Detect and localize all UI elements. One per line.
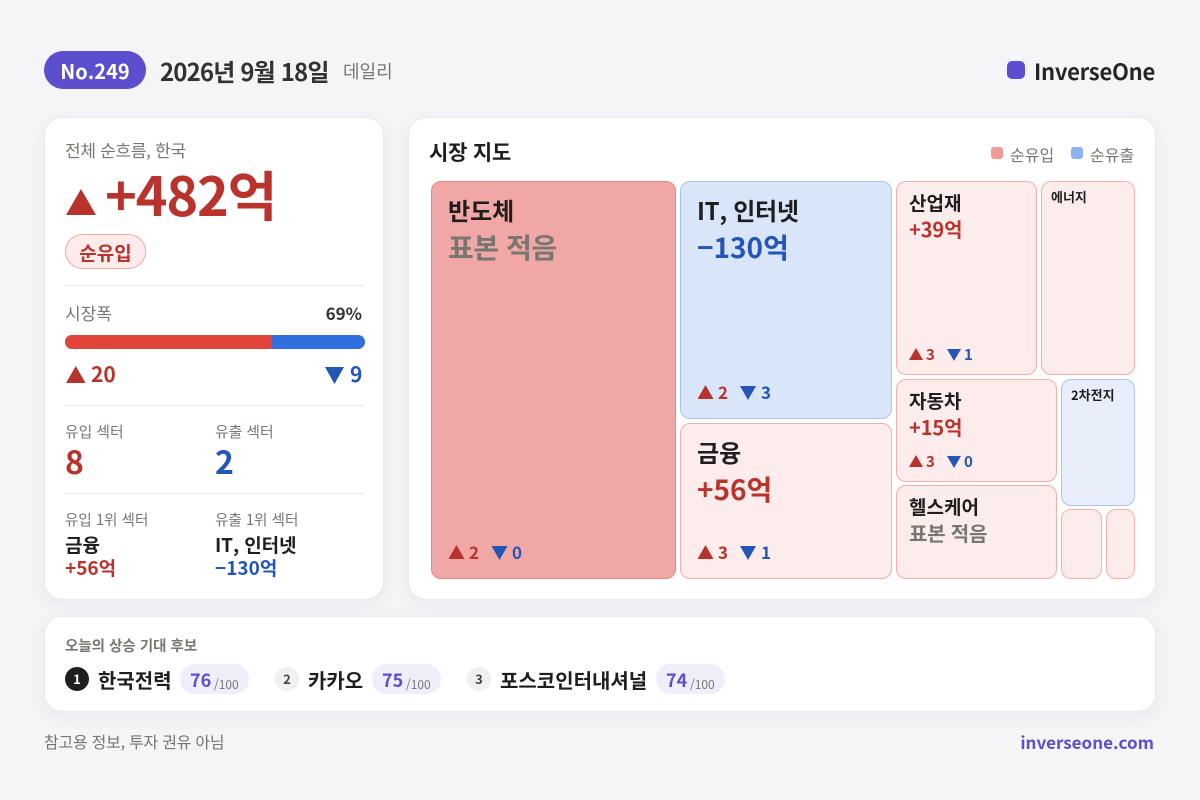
icon: down triangle count [325, 367, 344, 384]
tile: IT, internet [680, 181, 892, 419]
tile: industrials: 3 [926, 344, 935, 365]
net inflow pill [65, 234, 146, 269]
candidate 3 score: 74 [666, 667, 687, 693]
tile: autos [896, 379, 1057, 482]
candidate 1 rank: 1 [73, 669, 81, 688]
candidate 1 score: /100 [214, 676, 239, 693]
candidates heading: 오늘의 상승 기대 후보 [65, 635, 197, 656]
tile: autos: 3 [926, 451, 935, 472]
logo icon [1007, 61, 1025, 79]
tile: autos: +15억 [909, 412, 962, 441]
tile: finance: 금융 [697, 434, 741, 469]
tile: healthcare: 헬스케어 [909, 493, 979, 520]
tile: batteries [1061, 379, 1135, 506]
tile: semiconductors [431, 181, 676, 579]
header badge: No.249: No.249 [60, 56, 130, 85]
candidate 3 score [656, 664, 725, 694]
tile: finance: 1 [761, 539, 771, 564]
tile: semiconductors: 2 [469, 539, 479, 564]
candidate 3 name: 포스코인터내셔널 [500, 665, 647, 694]
icon: large up triangle [66, 189, 96, 215]
panel: rising candidates [44, 616, 1156, 712]
logo wordmark: InverseOne [1034, 55, 1155, 87]
tile: IT, internet: 3 [761, 379, 771, 404]
tile: finance [680, 423, 892, 579]
tile: energy: 에너지 [1051, 187, 1087, 206]
tile: small unlabeled 2 [1106, 509, 1135, 579]
panel: total net flow [44, 117, 384, 600]
top outflow value: −130억 [215, 554, 277, 581]
top outflow label: 유출 1위 섹터 [215, 509, 298, 530]
tile: semiconductors: 표본 적음 [448, 227, 557, 267]
top outflow sector: IT, 인터넷 [215, 531, 296, 558]
tile: autos: 자동차 [909, 387, 961, 414]
advancers count: 20 [91, 359, 116, 389]
candidate 1 rank [65, 667, 89, 691]
candidate 1 score [180, 664, 249, 694]
inflow sector label: 유입 섹터 [65, 421, 124, 442]
candidate 3 rank: 3 [475, 669, 483, 688]
inflow sector count: 8 [65, 438, 84, 484]
market map title: 시장 지도 [429, 137, 511, 167]
tile: finance: 3 [718, 539, 728, 564]
tile: small unlabeled 1 [1061, 509, 1102, 579]
legend: net inflow [991, 142, 1054, 166]
top inflow sector: 금융 [65, 531, 100, 558]
footer disclaimer: 참고용 정보, 투자 권유 아님 [44, 729, 224, 753]
candidate 2 score: 75 [382, 667, 403, 693]
candidate 2 rank [275, 667, 299, 691]
legend: net inflow: 순유입 [1010, 142, 1054, 166]
tile: industrials: +39억 [909, 214, 962, 243]
candidate 1 name: 한국전력 [98, 665, 172, 694]
outflow sector count: 2 [215, 438, 234, 484]
top inflow value: +56억 [65, 554, 116, 581]
legend: net outflow: 순유출 [1090, 142, 1134, 166]
breadth label: 시장폭 [65, 300, 112, 325]
candidate 2 score [372, 664, 441, 694]
panel: market map [408, 117, 1156, 600]
tile: industrials [896, 181, 1037, 375]
tile: IT, internet: IT, 인터넷 [697, 192, 799, 227]
header date: 2026년 9월 18일 [160, 53, 329, 88]
breadth percent: 69% [326, 300, 362, 325]
tile: healthcare [896, 485, 1057, 579]
breadth bar [65, 335, 365, 349]
tile: energy [1041, 181, 1135, 375]
tile: industrials: 산업재 [909, 189, 961, 216]
tile: semiconductors: 반도체 [448, 192, 514, 227]
total flow value: +482억 [105, 153, 276, 232]
tile: finance: +56억 [697, 469, 772, 509]
total flow label: 전체 순흐름, 한국 [65, 137, 186, 162]
header badge: No.249 [44, 51, 146, 89]
candidate 1 score: 76 [190, 667, 211, 693]
tile: IT, internet: −130억 [697, 227, 789, 267]
top inflow label: 유입 1위 섹터 [65, 509, 148, 530]
candidate 3 score: /100 [690, 676, 715, 693]
tile: semiconductors: 0 [512, 539, 522, 564]
tile: autos: 0 [964, 451, 973, 472]
candidate 2 score: /100 [406, 676, 431, 693]
footer site link: inverseone.com [1020, 729, 1154, 754]
tile: healthcare: 표본 적음 [909, 518, 987, 547]
candidate 2 rank: 2 [283, 669, 291, 688]
candidate 3 rank [467, 667, 491, 691]
legend: net outflow [1071, 142, 1134, 166]
candidate 2 name: 카카오 [308, 665, 363, 694]
header label: daily: 데일리 [343, 58, 393, 84]
icon: up triangle count [66, 366, 86, 383]
net inflow pill: 순유입 [79, 239, 132, 266]
tile: IT, internet: 2 [718, 379, 728, 404]
decliners count: 9 [350, 359, 362, 389]
tile: batteries: 2차전지 [1071, 385, 1115, 404]
outflow sector label: 유출 섹터 [215, 421, 274, 442]
tile: industrials: 1 [964, 344, 973, 365]
